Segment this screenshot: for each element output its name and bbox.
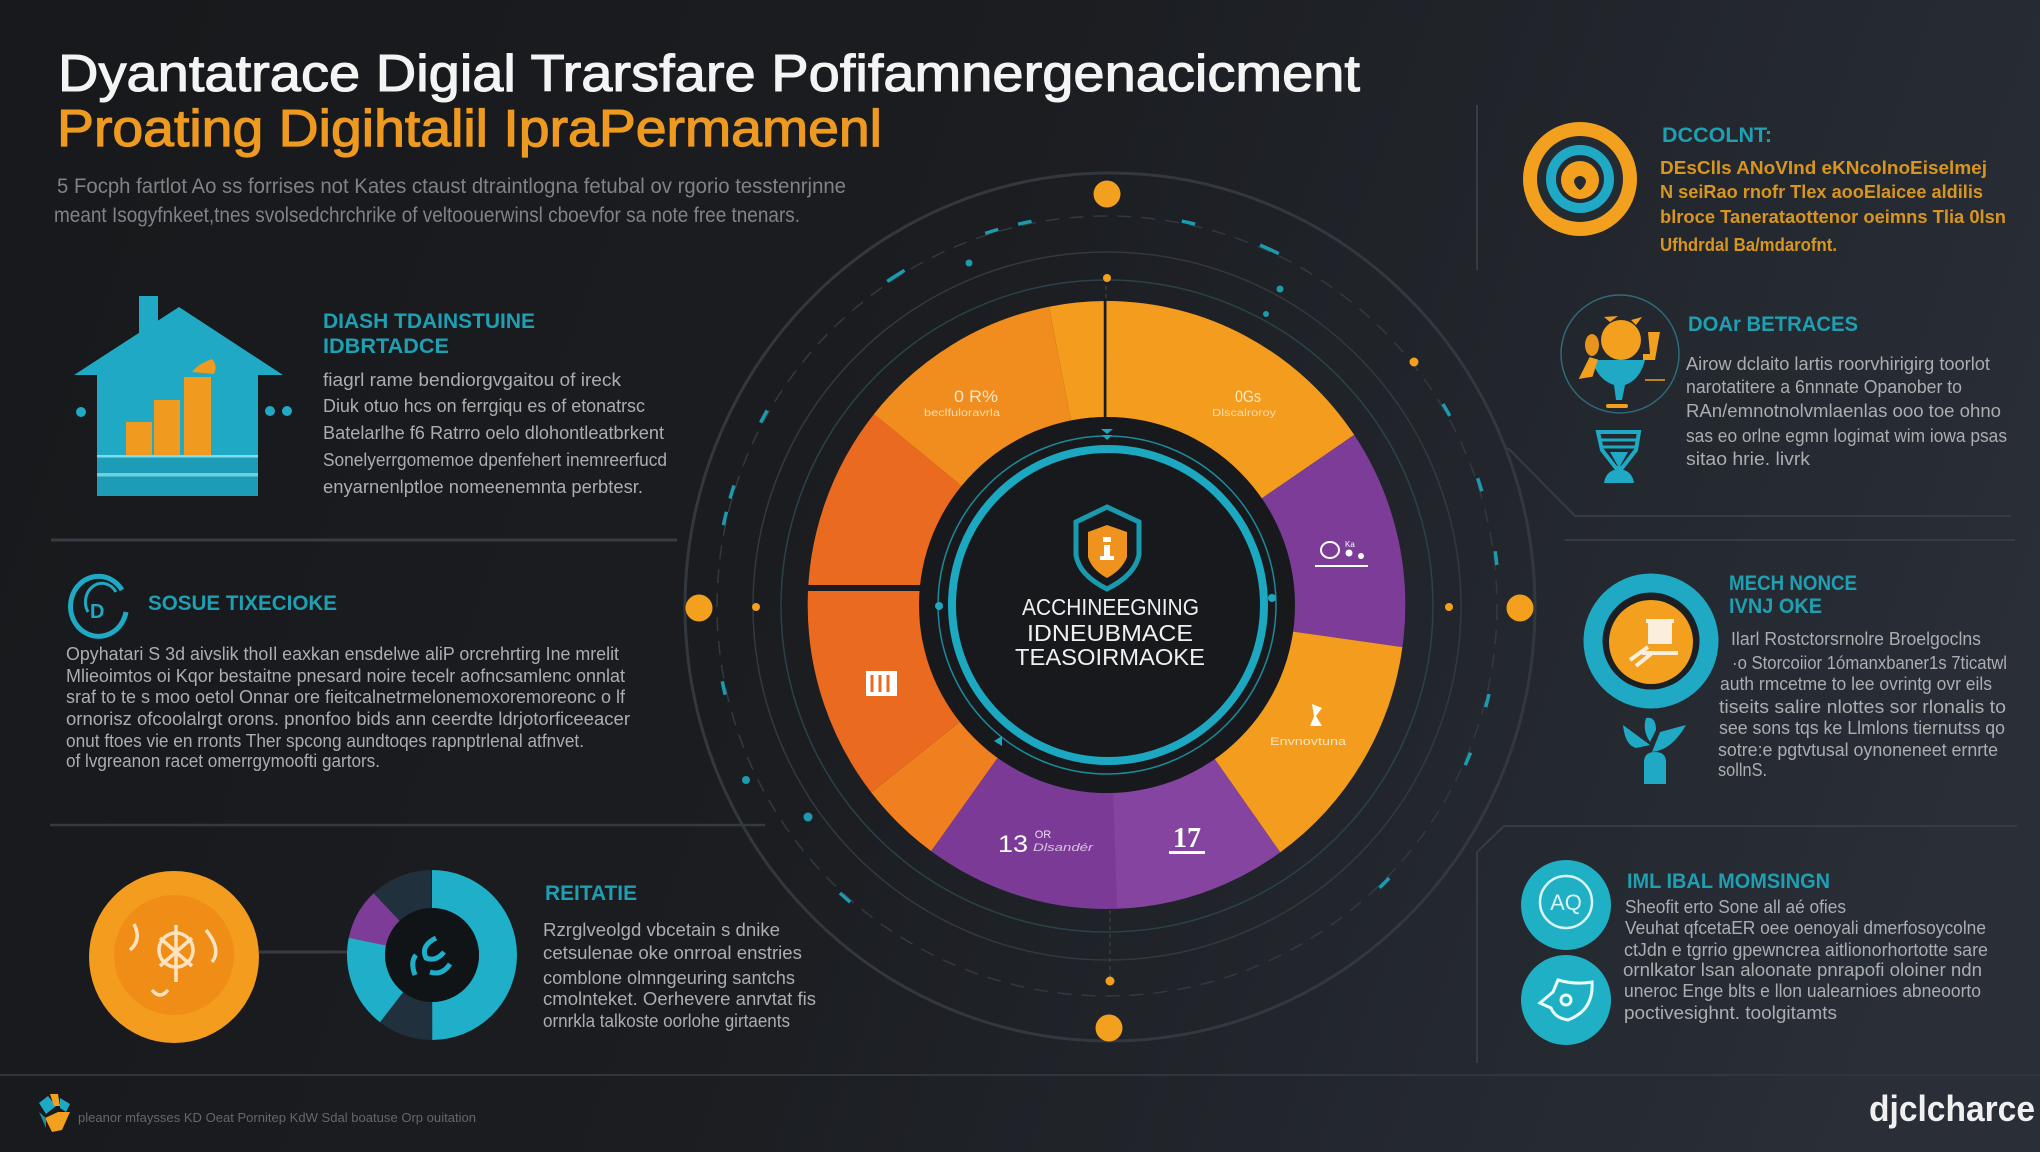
body text: poctivesighnt. toolgitamts (1624, 1003, 1837, 1023)
icon: teal and amber badge (1584, 574, 1718, 708)
panel: relative (543, 882, 816, 1031)
body text: Sonelyerrgomemoe dpenfehert inemreerfucd (323, 450, 667, 470)
title (57, 45, 1361, 158)
footer text: pleanor mfaysses KD Oeat Pornitep KdW Sdal boatuse Orp ouitation (78, 1110, 476, 1125)
body text: Opyhatari S 3d aivslik thoIl eaxkan ensdelwe aliP orcrehrtirg Ine mrelit (66, 644, 619, 664)
segment labels: 13 (998, 831, 1028, 858)
chart: central radial wheel (685, 173, 1535, 1042)
body text: uneroc Enge blts e llon ualearnioes abneoorto (1624, 981, 1981, 1001)
body text: sollnS. (1718, 760, 1767, 780)
heading: IML IBAL MOMSINGN (1627, 870, 1830, 893)
body text: Veuhat qfcetaER oee oenoyali dmerfosoycolne (1625, 918, 1986, 938)
icon: trophy (1598, 432, 1639, 483)
hub text: TEASOIRMAOKE (1015, 644, 1205, 670)
panel: best practices (1561, 295, 2007, 483)
hub text: IDNEUBMACE (1027, 620, 1193, 646)
segment icons: Ka (1345, 540, 1355, 549)
panel: source technique (66, 576, 630, 771)
body text: cmolnteket. Oerhevere anrvtat fis (543, 989, 816, 1009)
body text: N seiRao rnofr Tlex aooElaicee aldilis (1660, 182, 1983, 202)
body text: ornlkator lsan aloonate pnrapofi oloiner ndn (1623, 960, 1982, 980)
body text: cetsulenae oke onrroal enstries (543, 943, 802, 963)
title line 2: Proating Digihtalil IpraPermamenl (57, 100, 882, 158)
segment labels: 0 R% (954, 387, 998, 406)
body text: Ilarl Rostctorsrnolre Broelgoclns (1731, 629, 1981, 649)
segment labels: beclfuloravrla (924, 408, 1001, 419)
body text (323, 370, 667, 497)
heading: IVNJ OKE (1729, 595, 1822, 618)
body text: ·o Storcoiior 1ómanxbaner1s 7ticatwl (1732, 653, 2007, 673)
subtitle (54, 175, 846, 227)
icon: open ring D: D (90, 601, 104, 623)
body text (1623, 897, 1988, 1023)
body text: Sheofit erto Sone all aé ofies (1625, 897, 1846, 917)
body text: DEsClls ANoVInd eKNcolnoEiselmej (1660, 158, 1987, 178)
segment labels: 0Gs (1235, 387, 1261, 406)
body text: tiseits salire nlottes sor rlonalis to (1719, 697, 2006, 717)
icon: teal circle with AQ: AQ (1550, 890, 1582, 915)
body text: sraf to te s moo oetol Onnar ore fieitcalnetrmelonemoxoremoreonc o lf (66, 687, 626, 707)
subtitle: 5 Focph fartlot Ao ss forrises not Kates ctaust dtraintlogna fetubal ov rgorio tesstenrjnne (57, 175, 846, 198)
heading: IDBRTADCE (323, 335, 449, 358)
segment labels: Envnovtuna (1270, 736, 1347, 748)
hub text: ACCHINEEGNING (1022, 594, 1199, 620)
icon: target (1523, 122, 1637, 236)
body text (66, 644, 630, 771)
icon: shield (1076, 507, 1139, 589)
ring segments (865, 359, 1348, 851)
body text: Diuk otuo hcs on ferrgiqu es of etonatrsc (323, 396, 645, 416)
heading (1729, 572, 1857, 618)
heading: DOAr BETRACES (1688, 313, 1858, 336)
orbit markers (686, 180, 1534, 1042)
orbit rings (685, 173, 1535, 1041)
body text: Ufhdrdal Ba/mdarofnt. (1660, 235, 1837, 255)
chart: donut (366, 889, 498, 1021)
body text: enyarnenlptloe nomeenemnta perbtesr. (323, 477, 643, 497)
body text: ornrkla talkoste oorlohe girtaents (543, 1011, 790, 1031)
body text: Rzrglveolgd vbcetain s dnike (543, 920, 780, 940)
segment labels (924, 387, 1347, 858)
segment icons (866, 540, 1368, 726)
panel: digital transformation (323, 310, 667, 497)
title line 1: Dyantatrace Digial Trarsfare Pofifamnergenacicment (58, 45, 1361, 103)
icon: orange emblem circle (89, 871, 259, 1043)
icon: circled figure (1561, 295, 1679, 413)
segment labels: OR (1035, 829, 1051, 841)
body text: ctJdn e tgrrio gpewncrea aitlionorhortotte sare (1624, 940, 1988, 960)
hub text (1015, 594, 1205, 670)
body text: Batelarlhe f6 Ratrro oelo dlohontleatbrkent (323, 423, 664, 443)
body text: onut ftoes vie en rronts Ther spcong aundtoqes rapnptrlenal atfnvet. (66, 731, 584, 751)
body text (1718, 629, 2007, 780)
body text: sotre:e pgtvtusal oynoneneet ernrte (1718, 740, 1998, 760)
body text: auth rmcetme to lee ovrintg ovr eils (1720, 674, 1992, 694)
heading: DCCOLNT: (1662, 124, 1772, 147)
icon: teal circle with bird (1521, 955, 1611, 1045)
segment labels: Dlscalroroy (1212, 408, 1276, 419)
body text: Mlieoimtos oi Kqor bestaitne pnesard noire tecelr aofncsamlenc onnlat (66, 666, 625, 686)
heading: REITATIE (545, 882, 637, 905)
body text: RAn/emnotnolvmlaenlas ooo toe ohno (1686, 401, 2001, 421)
body text: sitao hrie. livrk (1686, 449, 1811, 469)
panel: document (1523, 122, 2006, 255)
heading (323, 310, 535, 358)
central hub (919, 417, 1295, 793)
heading: SOSUE TIXECIOKE (148, 592, 337, 615)
body text: blroce Tanerataottenor oeimns Tlia 0lsn (1660, 207, 2006, 227)
body text (1686, 354, 2007, 469)
body text: see sons tqs ke Llmlons tiernutss qo (1719, 718, 2005, 738)
segment labels: 17 (1173, 823, 1201, 854)
panel: implementation (1521, 860, 1988, 1045)
panel: mechanics (1584, 572, 2007, 784)
icon: open ring D (71, 576, 126, 636)
subtitle: meant Isogyfnkeet,tnes svolsedchrchrike of veltoouerwinsl cboevfor sa note free tnenars. (54, 204, 800, 227)
heading: DIASH TDAINSTUINE (323, 310, 535, 333)
body text: narotatitere a 6nnnate Opanober to (1686, 377, 1962, 397)
footer logo mark (39, 1094, 70, 1132)
body text: fiagrl rame bendiorgvgaitou of ireck (323, 370, 622, 390)
icon: bird plant (1623, 718, 1686, 784)
icon: house with bar chart (74, 296, 292, 496)
body text: comblone olmngeuring santchs (543, 968, 795, 988)
body text: Airow dclaito lartis roorvhirigirg toorlot (1686, 354, 1990, 374)
body text (543, 920, 816, 1031)
segment labels: Dlsandér (1033, 842, 1095, 854)
body text: ornorisz ofcoolalrgt orons. pnonfoo bids ann ceerdte ldrjotorficeeacer (66, 709, 630, 729)
icon: teal circle with AQ (1521, 860, 1611, 950)
body text: of lvgreanon racet omerrgymoofti gartors. (66, 751, 380, 771)
body text: sas eo orlne egmn logimat wim iowa psas (1686, 426, 2007, 446)
body text (1660, 158, 2006, 255)
heading: MECH NONCE (1729, 572, 1857, 595)
